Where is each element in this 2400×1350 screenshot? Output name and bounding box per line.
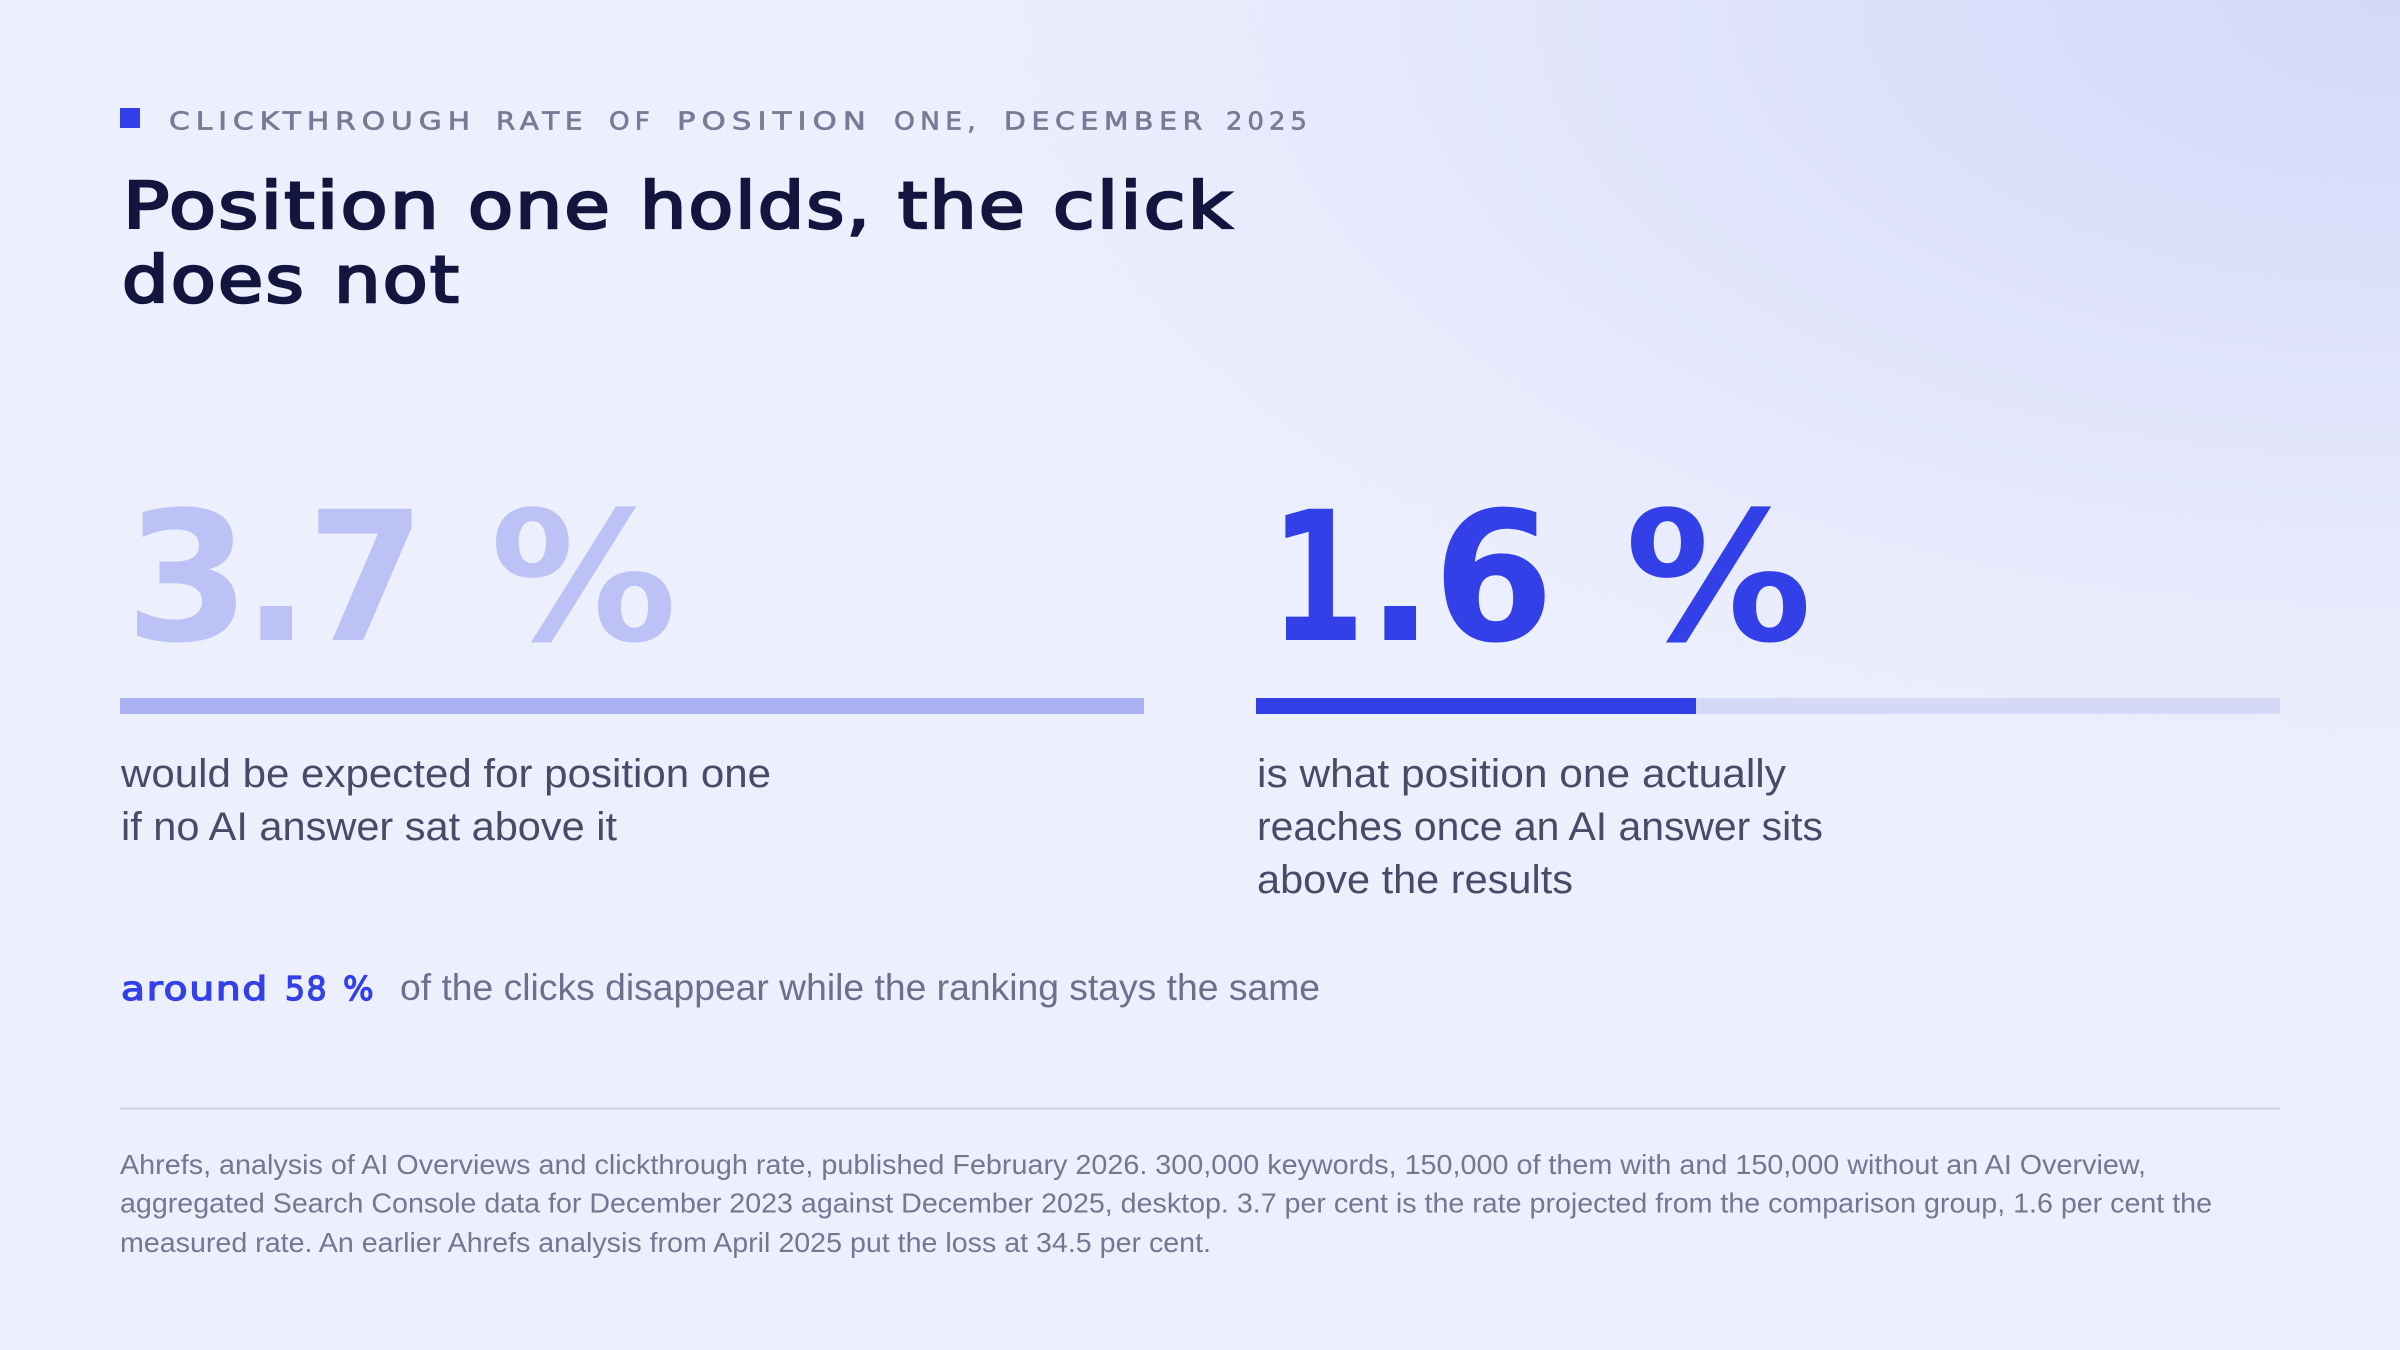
- panel: expected rate: [120, 474, 1144, 849]
- big number 1.6 %: [1270, 474, 1812, 683]
- description: actual: reaches once an AI answer sits: [1257, 805, 1823, 849]
- callout text: of the clicks disappear while the ranking stays the same: [400, 967, 1320, 1008]
- eyebrow label: ONE,: [894, 106, 981, 136]
- big number 1.6 %: 6: [1433, 474, 1554, 683]
- title: the: [898, 170, 1027, 244]
- callout figure: %: [343, 969, 375, 1008]
- big number 3.7 %: %: [490, 474, 677, 683]
- description: expected: if no AI answer sat above it: [121, 805, 617, 849]
- description: actual: [1257, 752, 1823, 902]
- source note: Ahrefs, analysis of AI Overviews and clickthrough rate, published February 2026. 300,000 keywords, 150,000 of them with and 150,000 without an AI Overview,: [120, 1149, 2146, 1180]
- eyebrow label: 2025: [1226, 106, 1312, 136]
- title: holds,: [640, 170, 872, 244]
- big number 3.7 %: [125, 474, 677, 683]
- icon: square marker: [120, 108, 140, 128]
- title: click: [1053, 170, 1234, 244]
- description: actual: above the results: [1257, 858, 1573, 902]
- big number 1.6 %: 1: [1270, 474, 1365, 683]
- panel: actual rate: [1256, 474, 2280, 902]
- callout figure: [121, 969, 375, 1008]
- callout: [121, 967, 1320, 1008]
- eyebrow label: RATE: [496, 106, 588, 136]
- callout figure: 58: [285, 969, 328, 1008]
- eyebrow label: [169, 106, 1312, 136]
- callout figure: around: [121, 969, 269, 1008]
- bar: expected full: [120, 698, 1144, 714]
- description: expected: would be expected for position one: [120, 752, 771, 796]
- big number 1.6 %: .: [1366, 474, 1434, 683]
- big number 3.7 %: 7: [307, 474, 425, 683]
- eyebrow: [120, 106, 1312, 136]
- big number 1.6 %: %: [1625, 474, 1812, 683]
- source note: [120, 1149, 2212, 1258]
- divider: [120, 1108, 2280, 1110]
- source note: measured rate. An earlier Ahrefs analysis from April 2025 put the loss at 34.5 per cent.: [120, 1227, 1211, 1258]
- title: Position: [123, 170, 441, 244]
- bar: actual share: [1256, 698, 2280, 714]
- title: one: [468, 170, 612, 244]
- title: [122, 170, 1234, 318]
- eyebrow label: DECEMBER: [1004, 106, 1208, 136]
- description: expected: [120, 752, 771, 849]
- eyebrow label: CLICKTHROUGH: [169, 106, 476, 136]
- big number 3.7 %: 3: [125, 474, 250, 683]
- eyebrow label: POSITION: [677, 106, 872, 136]
- big number 3.7 %: .: [242, 474, 310, 683]
- title: not: [334, 244, 461, 318]
- title: does: [122, 244, 306, 318]
- description: actual: is what position one actually: [1257, 752, 1786, 796]
- source note: aggregated Search Console data for December 2023 against December 2025, desktop. 3.7 per cent is the rate projected from the comparison group, 1.6 per cent the: [120, 1188, 2212, 1218]
- eyebrow label: OF: [609, 106, 655, 136]
